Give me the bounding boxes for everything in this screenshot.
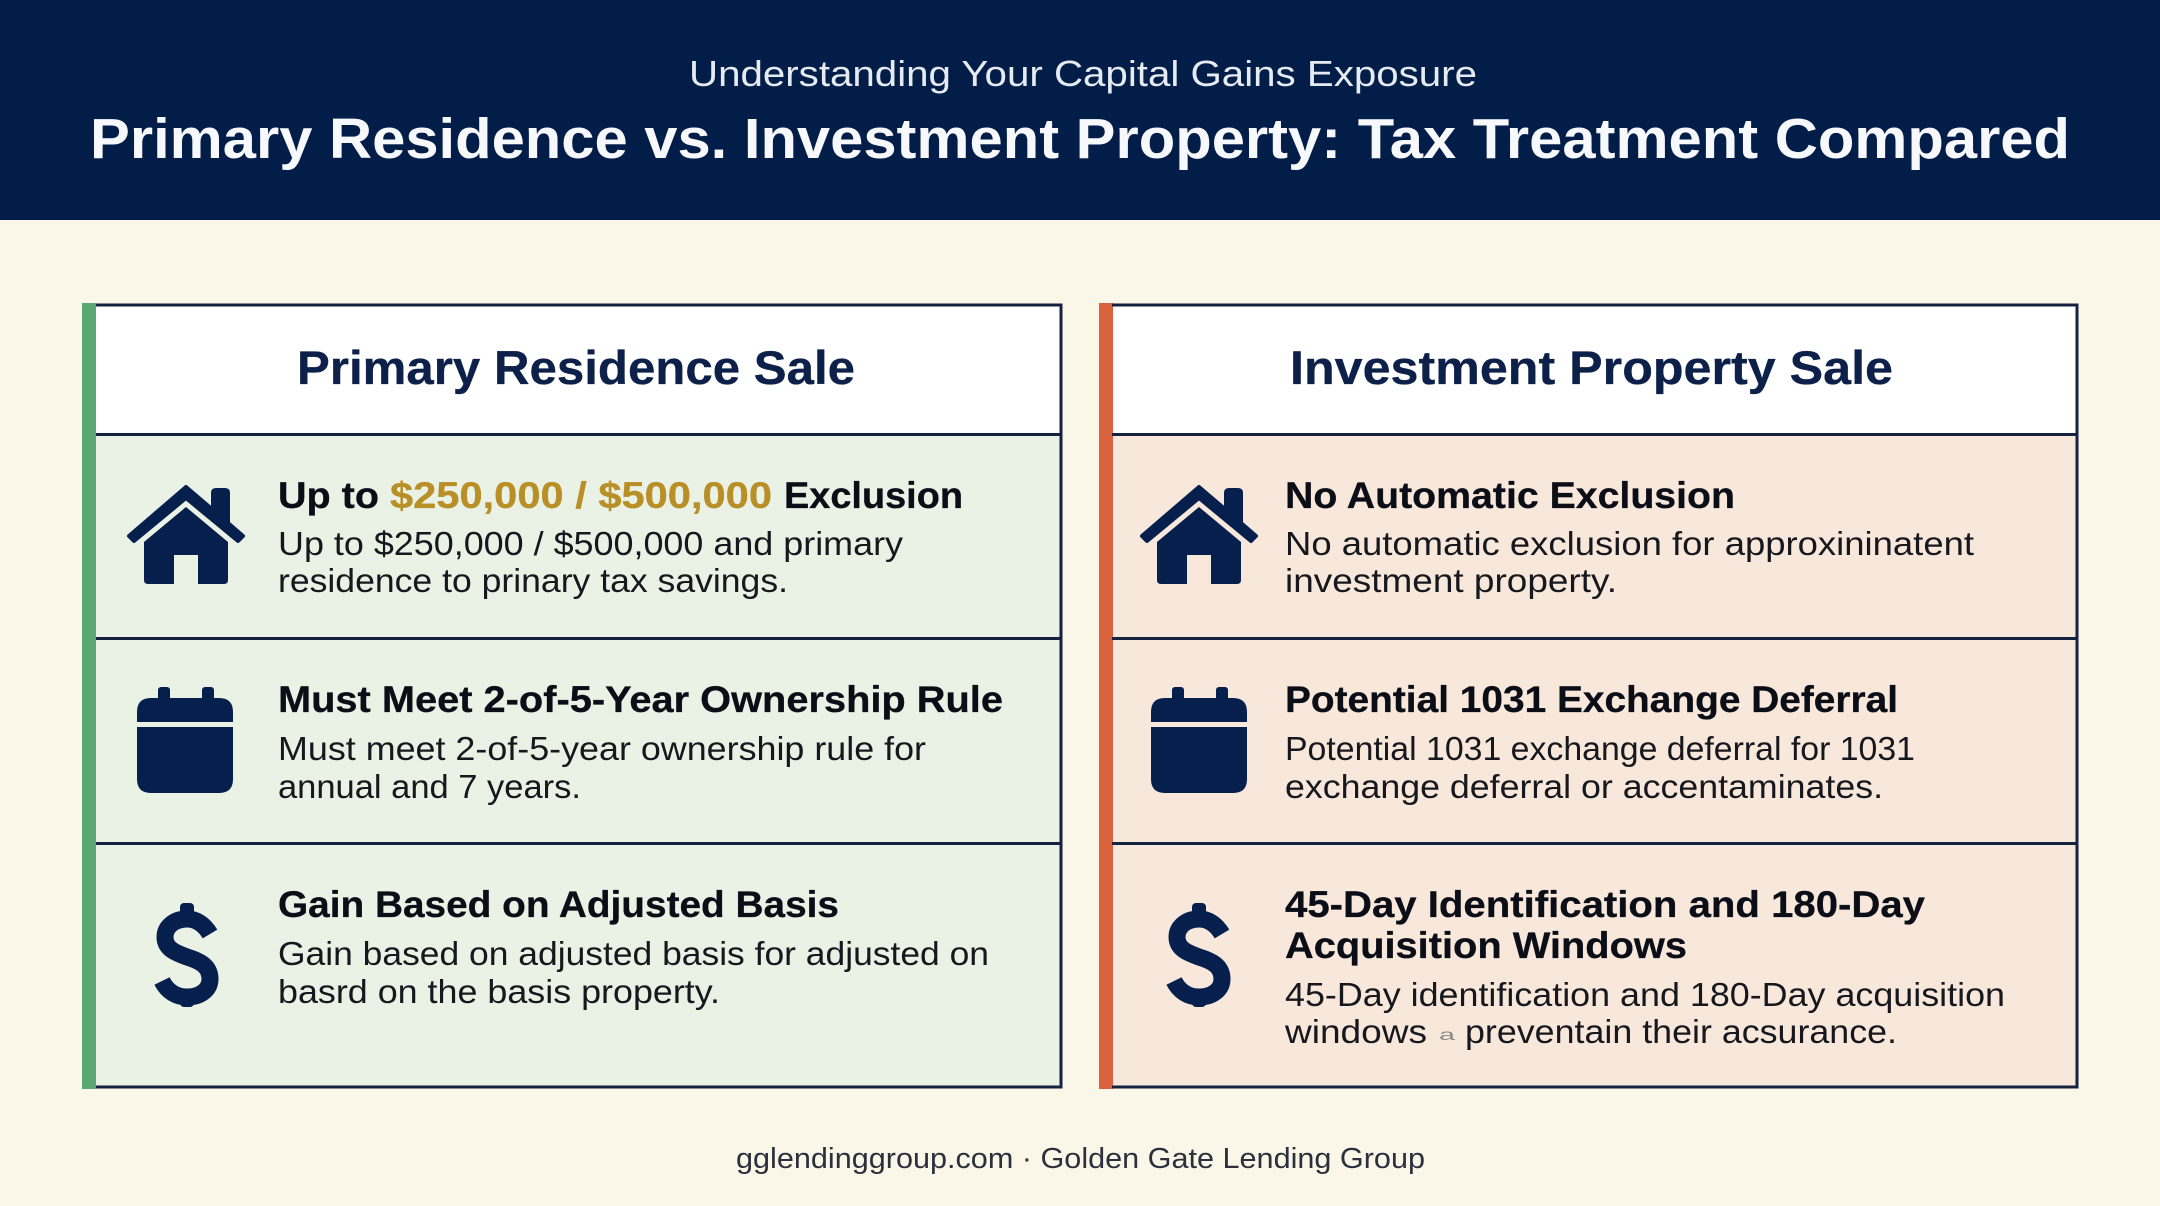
row: 1031 exchange — [1151, 679, 1915, 805]
row: adjusted basis — [162, 884, 989, 1010]
row text: identification windows: a — [1439, 1027, 1455, 1044]
row text: identification windows: 45-Day identification and 180-Day acquisition — [1285, 976, 2005, 1013]
icon: calendar — [137, 687, 233, 793]
row: ownership rule — [137, 679, 1003, 805]
row text: adjusted basis: Gain based on adjusted basis for adjusted on — [278, 935, 989, 972]
panel heading: primary residence sale: Primary Residence Sale — [297, 341, 855, 394]
row title: no exclusion: No Automatic Exclusion — [1285, 475, 1735, 516]
row title: 1031 exchange: Potential 1031 Exchange Deferral — [1285, 679, 1898, 720]
row text: 1031 exchange: Potential 1031 exchange deferral for 1031 — [1285, 730, 1915, 767]
row: no exclusion — [1142, 475, 1974, 599]
row text: ownership rule: annual and 7 years. — [278, 768, 581, 805]
row title: exclusion — [278, 475, 963, 516]
subtitle: Understanding Your Capital Gains Exposure — [689, 53, 1477, 94]
row title: exclusion: Up to — [278, 475, 379, 516]
row title: ownership rule: Must Meet 2-of-5-Year Ownership Rule — [278, 679, 1003, 720]
row: identification windows — [1174, 884, 2005, 1050]
row text: no exclusion — [1285, 525, 1974, 599]
row text: adjusted basis: basrd on the basis property. — [278, 973, 720, 1010]
main title: Primary Residence vs. Investment Property: Tax Treatment Compared — [90, 107, 2070, 171]
row text: exclusion: residence to prinary tax savings. — [278, 562, 788, 599]
row text: identification windows — [1284, 976, 2005, 1050]
row text: identification windows: windows — [1284, 1013, 1427, 1050]
header banner — [0, 0, 2160, 220]
icon: house — [129, 487, 243, 584]
icon: house — [1142, 487, 1256, 584]
panel heading: investment property sale: Investment Property Sale — [1290, 341, 1893, 394]
row title: identification windows: Acquisition Windows — [1285, 925, 1687, 966]
row text: identification windows: preventain their acsurance. — [1465, 1013, 1897, 1050]
row: exclusion — [129, 475, 963, 599]
row text: ownership rule — [278, 730, 926, 805]
row title: identification windows — [1285, 884, 1925, 966]
footer: gglendinggroup.com · Golden Gate Lending Group — [736, 1143, 1425, 1175]
row text: no exclusion: investment property. — [1285, 562, 1617, 599]
icon: dollar sign — [162, 903, 210, 1007]
panel: investment property sale — [1099, 303, 2078, 1089]
row title: exclusion: Exclusion — [784, 475, 963, 516]
row title: adjusted basis: Gain Based on Adjusted Basis — [278, 884, 839, 925]
row text: exclusion — [278, 525, 904, 599]
icon: dollar sign — [1174, 903, 1222, 1007]
row text: adjusted basis — [278, 935, 989, 1010]
panel: primary residence sale — [82, 303, 1062, 1089]
row text: no exclusion: No automatic exclusion for approxininatent — [1285, 525, 1974, 562]
row text: ownership rule: Must meet 2-of-5-year ownership rule for — [278, 730, 926, 767]
row text: exclusion: Up to $250,000 / $500,000 and primary — [278, 525, 904, 562]
row title: identification windows: 45-Day Identification and 180-Day — [1285, 884, 1925, 925]
icon: calendar — [1151, 687, 1247, 793]
row text: 1031 exchange — [1285, 730, 1915, 805]
row text: 1031 exchange: exchange deferral or accentaminates. — [1285, 768, 1883, 805]
row title: exclusion: $250,000 / $500,000 — [390, 475, 772, 516]
